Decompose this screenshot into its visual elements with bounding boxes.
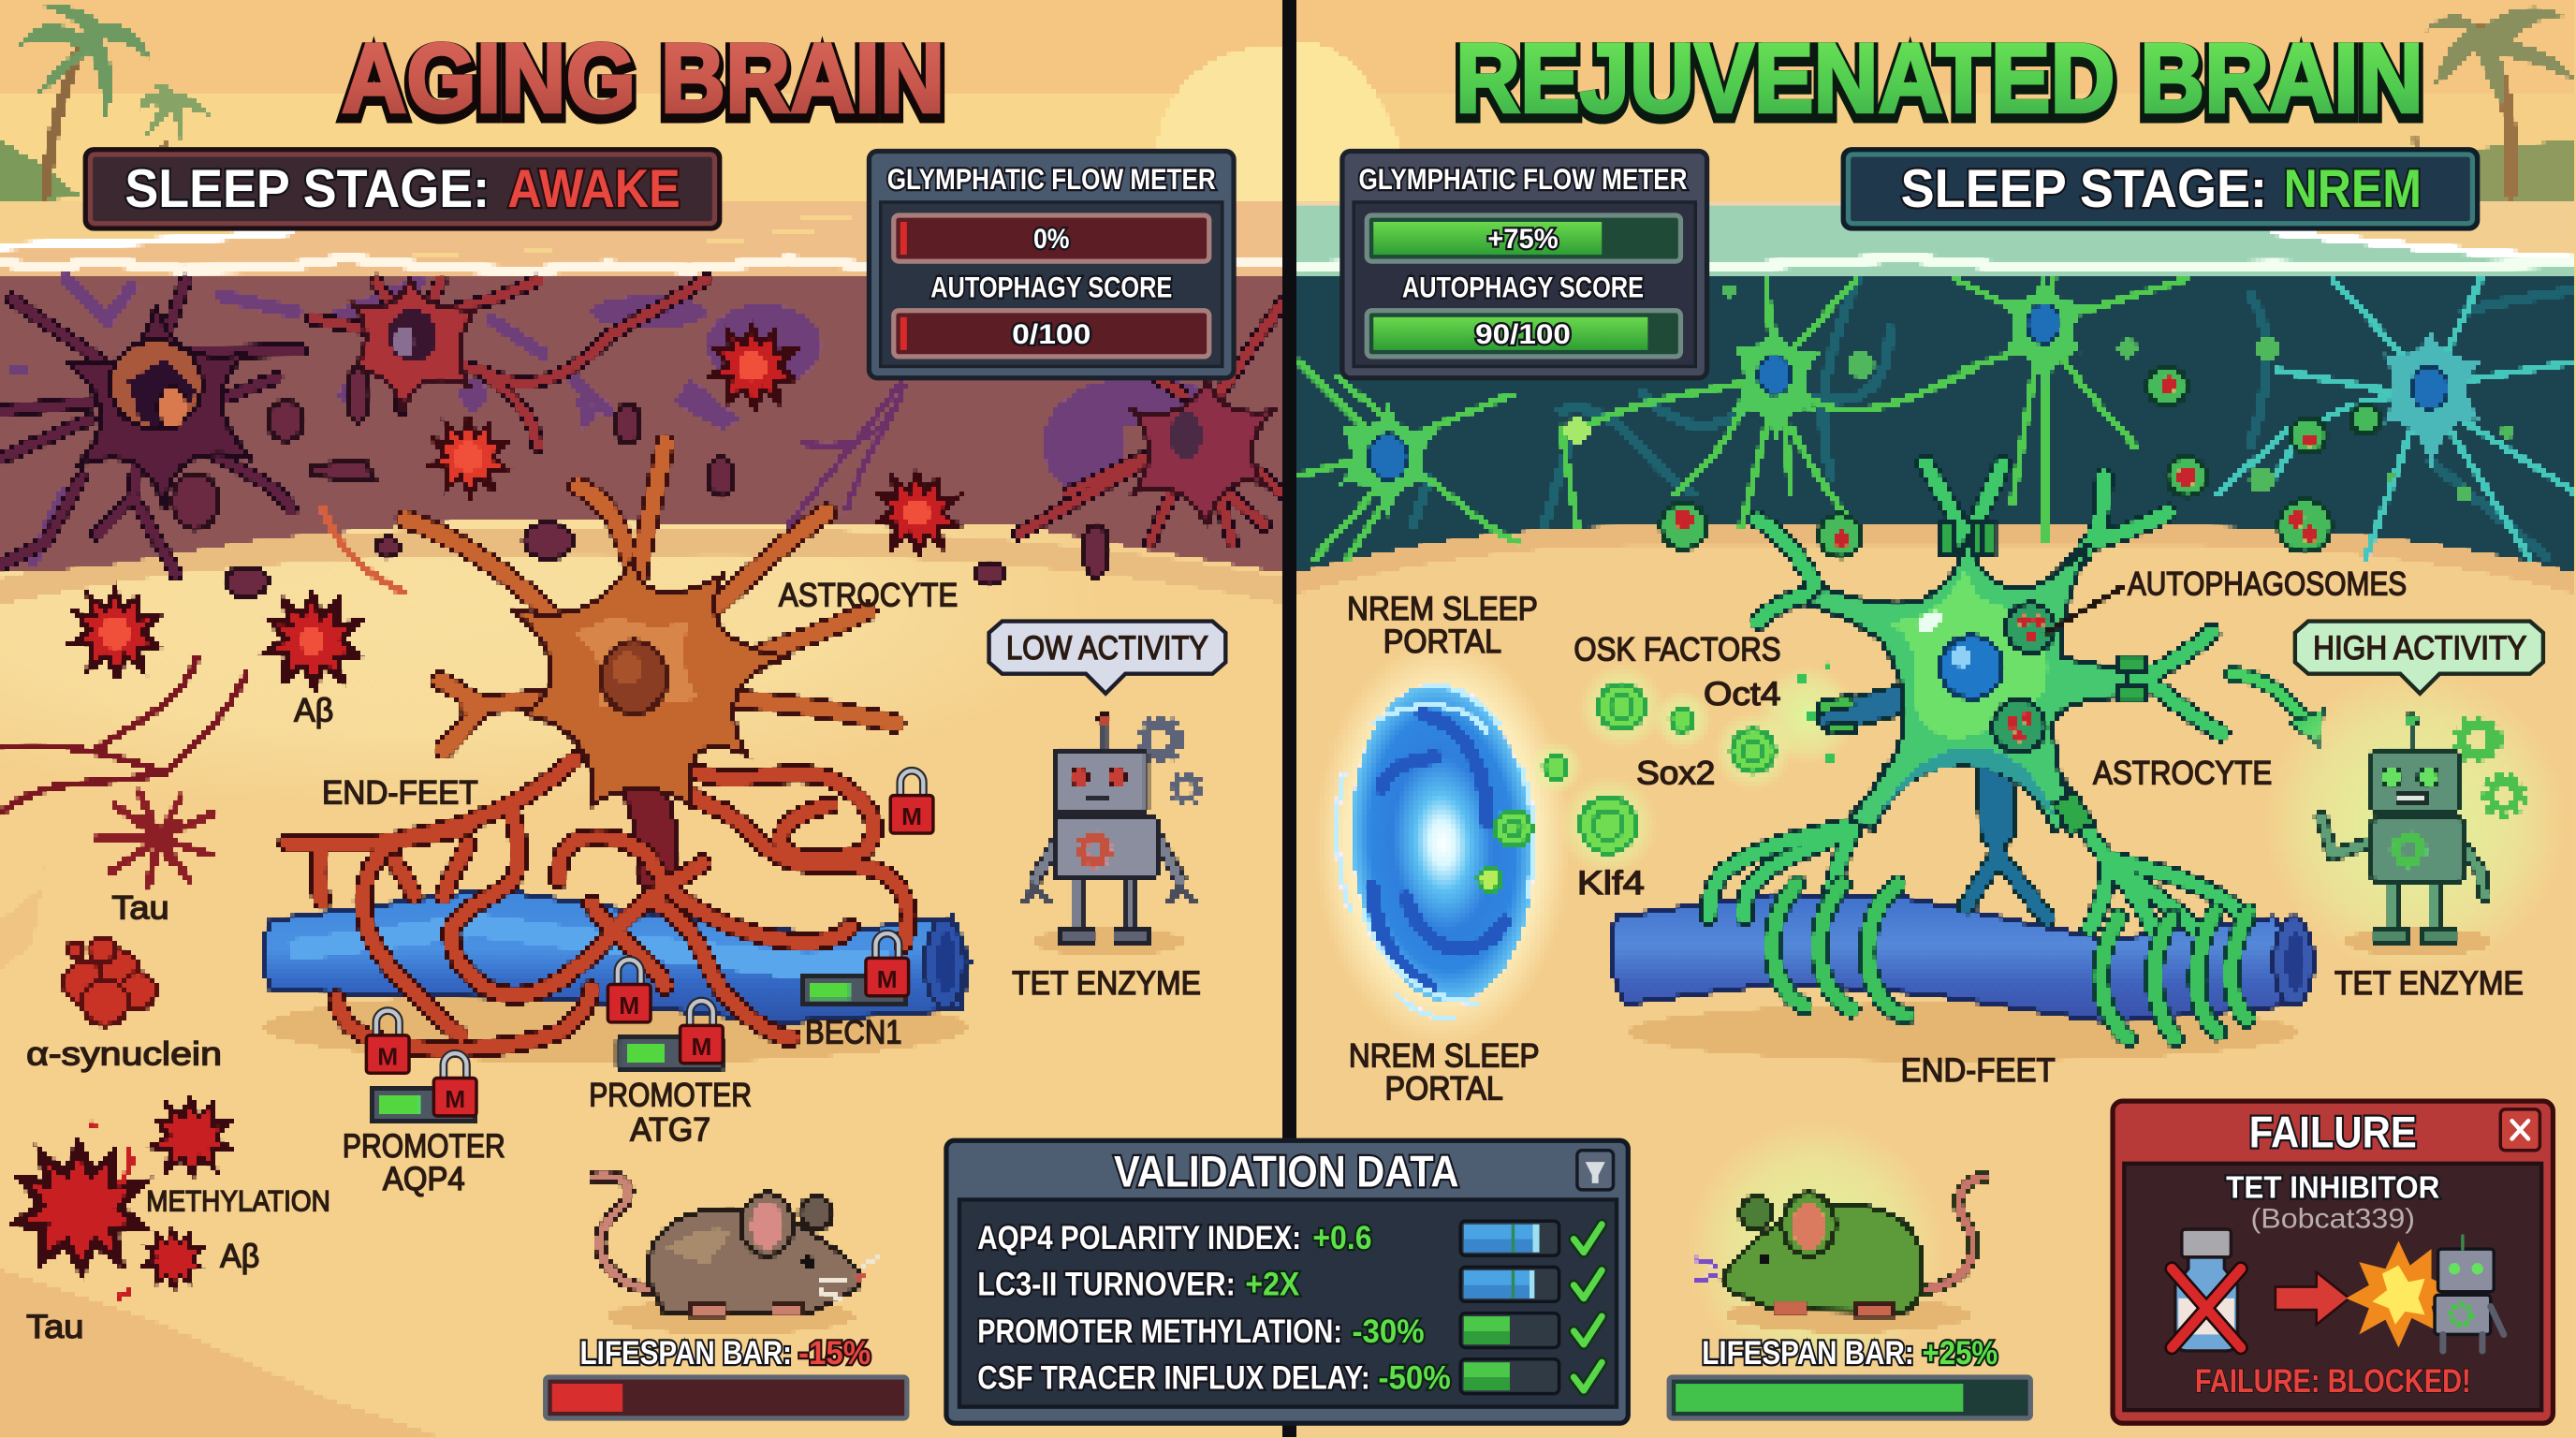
autophagy bar: 90/100 — [1367, 311, 1680, 357]
labels: rejuvenated side: END-FEET — [1901, 1052, 2056, 1089]
arrow: inhibitor to robot — [2276, 1272, 2349, 1325]
sleep stage banner: NREM — [1843, 150, 2478, 228]
sleep stage banner: awake — [85, 150, 720, 228]
padlock 4: M — [691, 1033, 711, 1061]
background neurons and vesicles: rejuvenated — [1295, 276, 2576, 559]
failure panel: FAILURE: BLOCKED! — [2195, 1363, 2471, 1400]
labels: rejuvenated side: NREM SLEEP — [1347, 591, 1538, 627]
robot: TET enzyme high activity — [2264, 670, 2566, 973]
labels: aging side: Tau — [111, 889, 169, 926]
padlock 5: M — [877, 965, 898, 993]
row: AQP4 polarity — [977, 1220, 1602, 1256]
plaques and proteins: aging — [0, 326, 956, 1299]
NREM sleep portal — [1314, 639, 1571, 1047]
title: aging brain: AGING BRAIN — [342, 29, 944, 139]
palm tree left — [13, 6, 211, 194]
row: promoter methylation: -30% — [1352, 1313, 1425, 1350]
labels: aging side: END-FEET — [322, 774, 478, 811]
arrow: activity to robot — [2231, 674, 2323, 746]
palm tree right — [2415, 7, 2576, 194]
sleep stage banner: NREM: NREM — [2284, 159, 2422, 219]
failure panel: FAILURE — [2249, 1108, 2417, 1157]
rat: rejuvenated — [1687, 1121, 1984, 1377]
padlock 1 — [366, 1011, 409, 1073]
rat: aging — [594, 1176, 879, 1334]
speech bubble: high activity — [2295, 622, 2543, 694]
meter panel: aging — [869, 151, 1234, 378]
icon: crossed vial — [2172, 1229, 2241, 1351]
failure panel: TET INHIBITOR — [2226, 1171, 2439, 1206]
autophagy bar: 90/100: 90/100 — [1475, 319, 1571, 350]
padlocks: aging — [366, 770, 933, 1116]
padlock 2 — [433, 1053, 476, 1116]
labels: rejuvenated side: NREM SLEEP — [1349, 1037, 1540, 1074]
promoter switches: aging — [372, 976, 907, 1121]
lifespan meter: aging — [546, 1335, 907, 1418]
labels: aging side: PROMOTER — [589, 1077, 752, 1113]
icon: minimise trophy — [1577, 1151, 1614, 1190]
row: LC3-II turnover — [977, 1266, 1602, 1302]
autophagosomes in astrocyte — [1993, 603, 2056, 753]
end-feet rings around vessel — [1773, 884, 2247, 1038]
labels: aging side: PROMOTER — [343, 1128, 505, 1165]
validation data panel: VALIDATION DATA — [1114, 1147, 1459, 1196]
background scene: aging side — [0, 0, 1373, 1438]
title: rejuvenated brain: REJUVENATED BRAIN — [1456, 23, 2423, 133]
labels: rejuvenated side: ASTROCYTE — [2093, 755, 2272, 791]
glymphatic bar: 0%: 0% — [1033, 224, 1070, 255]
padlock 6 — [890, 770, 933, 833]
labels: aging side: Tau — [26, 1309, 84, 1345]
autophagy bar: 0/100 — [894, 311, 1209, 357]
labels: rejuvenated side: PORTAL — [1385, 1070, 1503, 1107]
meter panel: rejuvenated — [1342, 151, 1707, 378]
row: AQP4 polarity: AQP4 POLARITY INDEX: — [977, 1220, 1301, 1256]
glymphatic bar: 0% — [894, 215, 1209, 261]
robot: TET enzyme low activity — [1025, 713, 1201, 957]
lifespan meter: rejuvenated: +25% — [1922, 1335, 1998, 1372]
labels: aging side: AQP4 — [383, 1161, 465, 1197]
blood vessel: rejuvenated — [1611, 894, 2313, 1062]
lifespan meter: aging: LIFESPAN BAR: — [580, 1335, 792, 1372]
labels: rejuvenated side: PORTAL — [1383, 624, 1501, 660]
labels: rejuvenated side: Oct4 — [1704, 676, 1781, 712]
lifespan meter: rejuvenated — [1669, 1335, 2030, 1418]
failure panel: (Bobcat339) — [2250, 1203, 2415, 1234]
padlock 3 — [607, 960, 651, 1022]
labels: aging side: TET ENZYME — [1012, 965, 1201, 1002]
labels: rejuvenated side: TET ENZYME — [2334, 965, 2524, 1002]
astrocyte: aging — [287, 444, 908, 1049]
speech bubble: low activity: LOW ACTIVITY — [1006, 630, 1208, 667]
sleep stage banner: awake: AWAKE — [507, 159, 681, 219]
labels: aging side: Aβ — [220, 1238, 259, 1274]
blood vessel: aging — [263, 889, 970, 1064]
icon: explosion and blocked robot — [2346, 1236, 2504, 1351]
row: CSF tracer influx: -50% — [1379, 1359, 1451, 1396]
glymphatic bar: +75% — [1367, 215, 1680, 261]
labels: aging side: BECN1 — [805, 1015, 902, 1051]
padlock 1: M — [377, 1043, 398, 1071]
labels: rejuvenated side: AUTOPHAGOSOMES — [2128, 565, 2407, 602]
failure panel — [2113, 1101, 2553, 1423]
padlock 3: M — [619, 991, 639, 1020]
speech bubble: high activity: HIGH ACTIVITY — [2313, 630, 2526, 667]
padlock 6: M — [901, 802, 922, 830]
astrocyte: rejuvenated — [1708, 463, 2247, 929]
row: CSF tracer influx: CSF TRACER INFLUX DELAY: — [977, 1359, 1370, 1396]
speech bubble: low activity — [989, 622, 1225, 694]
row: AQP4 polarity: +0.6 — [1312, 1220, 1372, 1256]
close button — [2500, 1109, 2539, 1151]
meter panel: aging: GLYMPHATIC FLOW METER — [887, 162, 1216, 196]
meter panel: rejuvenated: AUTOPHAGY SCORE — [1402, 271, 1644, 304]
labels: rejuvenated side — [1347, 565, 2524, 1107]
OSK factor orbs and vesicles — [1479, 662, 1856, 890]
lifespan meter: aging: -15% — [798, 1335, 871, 1372]
autophagy bar: 0/100: 0/100 — [1012, 319, 1090, 350]
labels: aging side: METHYLATION — [146, 1184, 330, 1218]
labels: aging side: Aβ — [294, 693, 333, 729]
title: rejuvenated brain: REJUVENATED BRAIN — [1456, 29, 2423, 139]
labels: aging side — [26, 578, 1201, 1345]
validation data panel — [946, 1140, 1628, 1423]
divider line — [1283, 0, 1295, 1438]
labels: aging side: α-synuclein — [26, 1036, 222, 1073]
labels: aging side: ASTROCYTE — [779, 578, 958, 614]
labels: rejuvenated side: Sox2 — [1636, 755, 1715, 791]
labels: rejuvenated side: OSK FACTORS — [1573, 632, 1781, 668]
padlock 2: M — [445, 1085, 465, 1113]
title: aging brain: AGING BRAIN — [342, 23, 944, 133]
sleep stage banner: awake: SLEEP STAGE: — [124, 159, 490, 219]
background scene: rejuvenated side — [1295, 0, 2576, 1438]
glymphatic bar: +75%: +75% — [1487, 224, 1559, 255]
meter panel: rejuvenated: GLYMPHATIC FLOW METER — [1358, 162, 1688, 196]
lifespan meter: rejuvenated: LIFESPAN BAR: — [1702, 1335, 1914, 1372]
row: LC3-II turnover: +2X — [1245, 1266, 1300, 1302]
labels: aging side: ATG7 — [630, 1111, 710, 1148]
meter panel: aging: AUTOPHAGY SCORE — [930, 271, 1172, 304]
sleep stage banner: NREM: SLEEP STAGE: — [1901, 159, 2267, 219]
row: LC3-II turnover: LC3-II TURNOVER: — [977, 1266, 1236, 1302]
row: promoter methylation: PROMOTER METHYLATION: — [977, 1313, 1342, 1350]
labels: rejuvenated side: Klf4 — [1577, 865, 1645, 902]
padlock 4 — [681, 1001, 723, 1064]
padlock 5 — [866, 933, 909, 996]
background neurons and debris: aging — [0, 279, 1281, 596]
